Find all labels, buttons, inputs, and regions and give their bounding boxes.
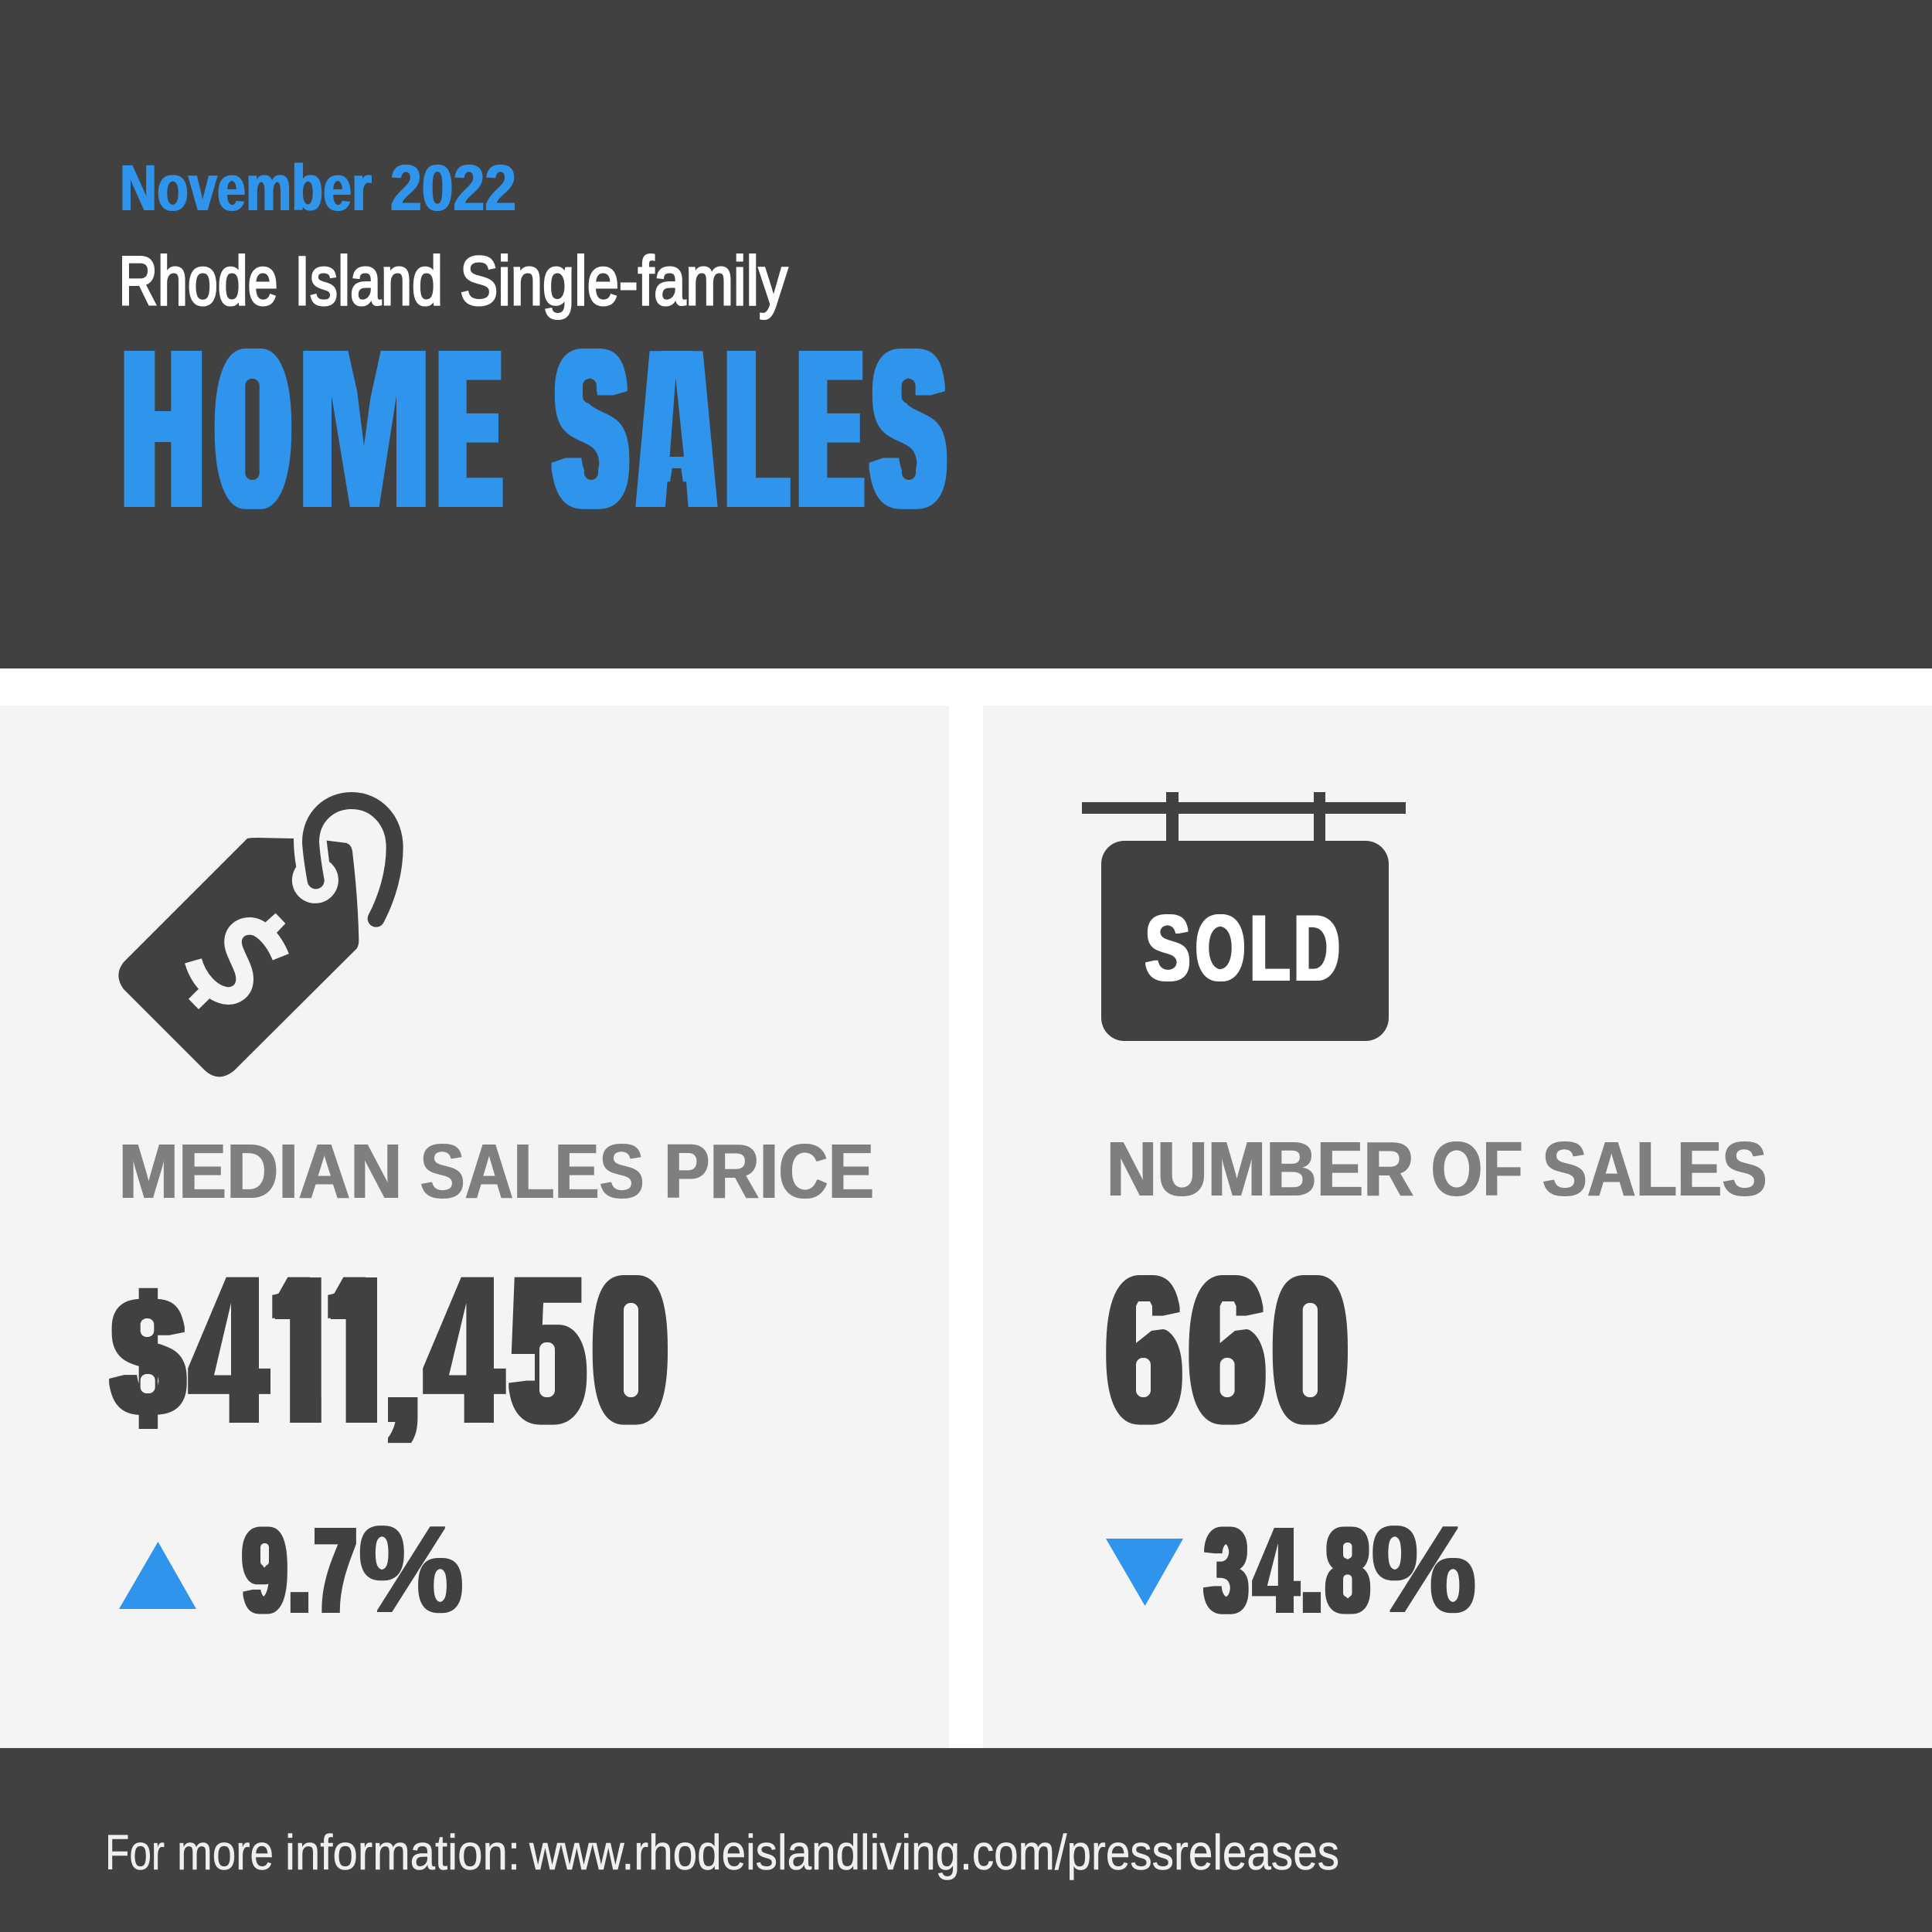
value: price change	[243, 1502, 464, 1638]
icon: price tag	[118, 801, 395, 1077]
value: median price: 1	[332, 1236, 373, 1464]
title: A	[643, 306, 710, 552]
panel: header: S	[874, 306, 944, 552]
value: median price: 0	[594, 1236, 667, 1464]
label: number of sales: OF	[1431, 1126, 1523, 1213]
panel: header	[0, 0, 1932, 668]
value: median price: 1	[276, 1236, 318, 1464]
title: H	[124, 306, 201, 552]
label: median sales price: MEDIAN	[119, 1128, 402, 1215]
value: sales change: .	[1301, 1504, 1321, 1637]
value: number of sales: 0	[1274, 1236, 1347, 1464]
date heading: November	[120, 151, 372, 224]
arrow: up triangle	[119, 1542, 196, 1609]
value: median price: ,	[386, 1298, 420, 1449]
title	[124, 306, 944, 552]
label: number of sales: NUMBER	[1107, 1126, 1414, 1213]
value: median price: 4	[427, 1236, 502, 1464]
value: sales change: %	[1371, 1502, 1476, 1638]
value: price change: 7	[315, 1504, 355, 1637]
value: median price: 5	[511, 1236, 584, 1464]
icon: sold sign: O	[1196, 896, 1246, 1000]
footer text: information:	[285, 1825, 520, 1880]
value: sales change: 4	[1255, 1504, 1298, 1637]
value: sales change: 8	[1327, 1504, 1369, 1637]
value: price change: .	[289, 1504, 309, 1637]
title: S	[556, 306, 626, 552]
label: number of sales: SALES	[1543, 1126, 1767, 1213]
subtitle: Single-family	[460, 242, 787, 319]
title: E	[801, 306, 860, 552]
value: price change: 9	[243, 1504, 287, 1637]
title: O	[219, 306, 287, 552]
subtitle: Rhode	[119, 242, 278, 319]
value: median price: 4	[192, 1236, 267, 1464]
value: median price	[114, 1236, 667, 1464]
value: number of sales	[1107, 1236, 1347, 1464]
date heading: 2022	[390, 151, 516, 224]
value: sales change	[1206, 1502, 1476, 1638]
panel: median sales price	[0, 706, 949, 1748]
title: M	[301, 306, 428, 552]
icon: sold sign	[1082, 792, 1406, 1041]
value: number of sales: 6	[1107, 1236, 1181, 1464]
value: number of sales: 6	[1190, 1236, 1264, 1464]
icon: sold sign: D	[1294, 896, 1340, 1000]
arrow: down triangle	[1106, 1539, 1183, 1606]
icon: sold sign: S	[1145, 896, 1190, 1000]
value: median price: $	[114, 1263, 182, 1450]
label: median sales price: SALES	[420, 1128, 645, 1215]
value: sales change: 3	[1206, 1504, 1247, 1637]
footer text: www.rhodeislandliving.com/pressreleases	[529, 1825, 1339, 1880]
value: price change: %	[359, 1502, 464, 1638]
icon: sold sign: L	[1250, 896, 1291, 1000]
title: L	[728, 306, 785, 552]
footer text: For	[105, 1825, 165, 1880]
title: E	[440, 306, 498, 552]
label: median sales price: PRICE	[664, 1128, 874, 1215]
panel: footer	[0, 1748, 1932, 1932]
subtitle: Island	[294, 242, 443, 319]
footer text: more	[177, 1825, 274, 1880]
panel: number of sales	[983, 706, 1932, 1748]
